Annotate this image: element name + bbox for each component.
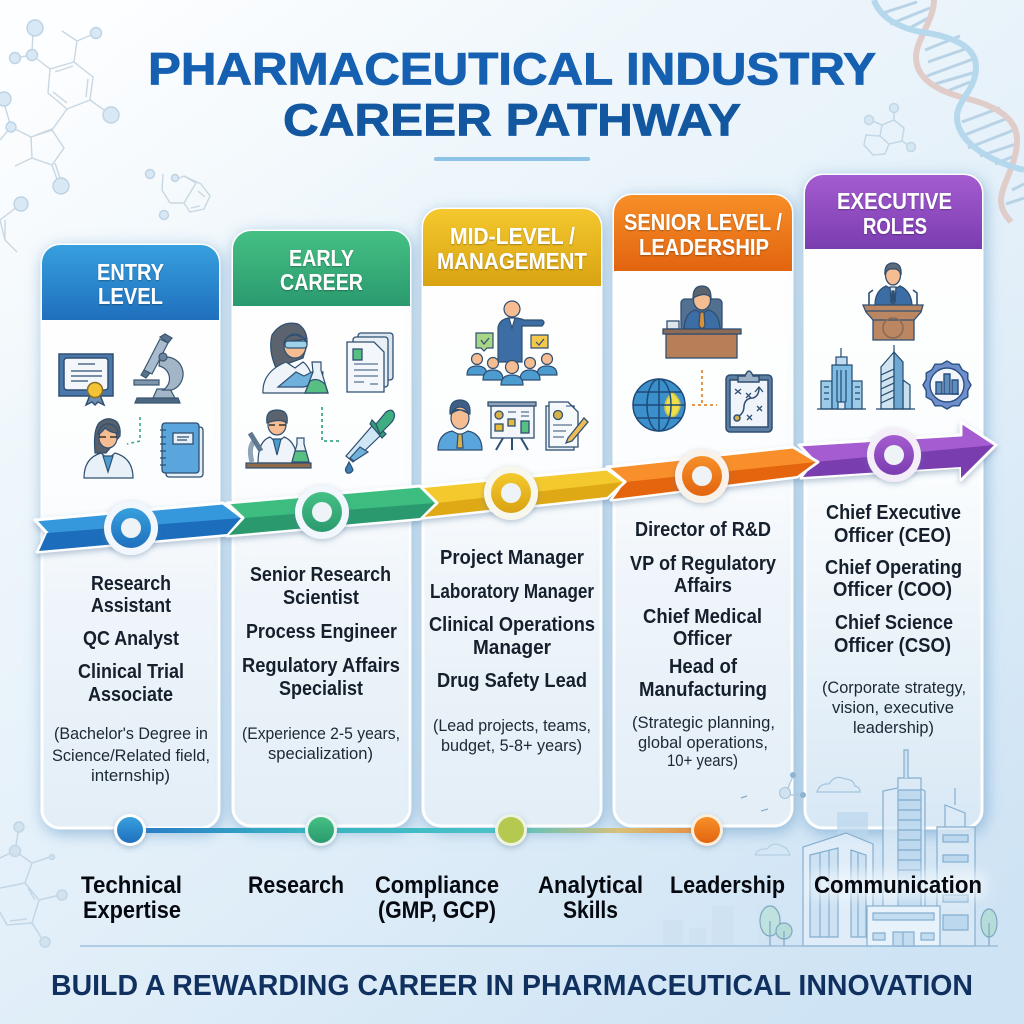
text: mid-level requirements: (Lead projects, teams, <box>433 717 591 735</box>
text: executive roles <box>825 502 962 657</box>
text: executive focus: leadership) <box>853 719 934 737</box>
title: PHARMACEUTICAL INDUSTRY <box>148 44 876 94</box>
decoration: molecule bottom left <box>0 822 67 947</box>
text: entry level requirements: Science/Related field, <box>52 747 210 765</box>
title <box>148 44 876 146</box>
text: executive focus: (Corporate strategy, <box>822 679 966 697</box>
heading: senior level leadership: SENIOR LEVEL / <box>624 209 783 235</box>
text: senior level requirements: (Strategic planning, <box>632 714 775 732</box>
skill labels: Skills <box>563 897 618 924</box>
icon: executive at desk <box>663 286 741 358</box>
panel: early career <box>233 231 410 826</box>
skill node: technical <box>114 814 146 846</box>
text: executive focus: vision, executive <box>832 699 954 717</box>
node: early career <box>295 485 349 539</box>
text: early career requirements: (Experience 2-5 years, <box>242 725 400 743</box>
illustration: city skyline <box>80 750 998 946</box>
ribbon segment: orange <box>607 447 818 500</box>
skill labels: Technical <box>81 872 182 899</box>
ribbon segment: purple arrow <box>799 422 996 480</box>
icon: dropper <box>346 410 394 473</box>
icon: notebook <box>160 423 203 477</box>
text: mid-level roles: Project Manager <box>440 547 584 569</box>
decoration: molecule top left <box>0 20 210 252</box>
text: early career roles: Process Engineer <box>246 621 397 643</box>
arrow: dotted <box>692 370 717 405</box>
icon: gear badge <box>923 361 971 409</box>
text: executive focus <box>822 679 966 737</box>
text: entry level roles: QC Analyst <box>83 628 179 650</box>
icon: document with pencil <box>546 402 588 450</box>
text: early career roles: Scientist <box>283 587 359 609</box>
heading: early career: EARLY <box>289 245 354 271</box>
panel: senior level leadership <box>614 195 792 826</box>
text: early career roles <box>242 564 400 700</box>
text: senior level roles: Chief Medical <box>643 606 762 628</box>
text: early career requirements: specialization) <box>268 745 373 763</box>
text: mid-level roles: Manager <box>473 637 551 659</box>
panel: mid-level management <box>423 209 601 826</box>
ribbon segment: green <box>227 486 437 536</box>
text: senior level roles: Affairs <box>674 575 732 597</box>
footer tagline: BUILD A REWARDING CAREER IN PHARMACEUTICAL INNOVATION <box>51 970 973 1002</box>
text: senior level roles: Director of R&D <box>635 519 771 541</box>
text: entry level roles: Associate <box>88 684 173 706</box>
text: mid-level roles: Clinical Operations <box>429 614 595 636</box>
node: mid-level <box>484 466 538 520</box>
text: senior level roles: Manufacturing <box>639 679 767 701</box>
text: senior level roles: Officer <box>673 628 732 650</box>
heading: early career <box>233 231 410 306</box>
icon: speaker at podium <box>863 263 923 340</box>
text: senior level requirements: 10+ years) <box>667 752 738 770</box>
text: mid-level requirements <box>433 717 591 755</box>
text: executive roles: Chief Executive <box>826 502 961 524</box>
decoration: small molecule top right <box>864 104 916 155</box>
text: early career requirements <box>242 725 400 763</box>
skill labels: (GMP, GCP) <box>378 897 496 924</box>
text: entry level requirements: (Bachelor's Degree in <box>54 725 208 743</box>
icon: documents <box>347 333 393 392</box>
heading: executive roles <box>805 175 982 249</box>
skill labels <box>81 872 982 924</box>
text: executive roles: Officer (COO) <box>833 579 952 601</box>
icon: presentation board <box>488 402 536 450</box>
icon: presenter with team <box>467 301 557 385</box>
skill node: research <box>305 814 337 846</box>
text: entry level requirements <box>52 725 210 785</box>
text: mid-level roles: Laboratory Manager <box>430 581 594 603</box>
heading: mid-level management: MANAGEMENT <box>437 248 587 274</box>
skill labels: Compliance <box>375 872 499 899</box>
panel: entry level <box>42 245 219 828</box>
text: entry level roles: Assistant <box>91 595 171 617</box>
text: senior level requirements: global operations, <box>638 734 768 752</box>
text: senior level roles: Head of <box>669 656 737 678</box>
skill labels: Communication <box>814 872 982 899</box>
heading: entry level <box>42 245 219 320</box>
text: executive roles: Officer (CEO) <box>834 525 951 547</box>
skill labels: Leadership <box>670 872 785 899</box>
heading: entry level: LEVEL <box>98 283 163 309</box>
text: entry level roles: Research <box>91 573 171 595</box>
text: senior level roles <box>630 519 777 701</box>
text: entry level requirements: internship) <box>91 767 170 785</box>
icon: strategy clipboard <box>726 371 772 432</box>
heading: senior level leadership <box>614 195 792 271</box>
heading: mid-level management: MID-LEVEL / <box>450 223 576 249</box>
node: entry level <box>104 501 158 555</box>
heading: senior level leadership: LEADERSHIP <box>639 234 769 260</box>
heading: executive roles: EXECUTIVE <box>837 188 952 214</box>
text: executive roles: Chief Operating <box>825 557 962 579</box>
skill node: compliance <box>495 814 527 846</box>
icon: female scientist <box>263 323 328 393</box>
node: senior level <box>675 449 729 503</box>
arrow: dotted <box>127 417 140 444</box>
icon: certificate <box>59 354 113 405</box>
node: executive <box>867 428 921 482</box>
text: mid-level roles: Drug Safety Lead <box>437 670 587 692</box>
text: entry level roles: Clinical Trial <box>78 661 184 683</box>
text: mid-level requirements: budget, 5-8+ years) <box>441 737 582 755</box>
ribbon segment: blue <box>35 503 243 552</box>
skill node: leadership <box>691 814 723 846</box>
icon: glass skyscraper <box>876 345 915 409</box>
text: early career roles: Regulatory Affairs <box>242 655 400 677</box>
skill labels: Research <box>248 872 344 899</box>
heading: entry level: ENTRY <box>97 259 164 285</box>
text: executive roles: Officer (CSO) <box>834 635 951 657</box>
text: senior level requirements <box>632 714 775 770</box>
text: early career roles: Senior Research <box>250 564 391 586</box>
heading: mid-level management <box>423 209 601 286</box>
text: early career roles: Specialist <box>279 678 363 700</box>
icon: male scientist with microscope <box>246 410 311 468</box>
text: mid-level roles <box>429 547 595 692</box>
text: executive roles: Chief Science <box>835 612 953 634</box>
decoration: DNA helix <box>874 0 1024 222</box>
icon: researcher <box>84 419 133 478</box>
heading: executive roles: ROLES <box>863 213 927 239</box>
icon: globe <box>633 379 685 431</box>
icon: microscope <box>134 334 183 403</box>
heading: early career: CAREER <box>280 269 363 295</box>
skill labels: Expertise <box>83 897 181 924</box>
title divider bar <box>434 157 590 161</box>
arrow: dotted <box>322 407 340 441</box>
title: CAREER PATHWAY <box>283 94 741 146</box>
career pathway ribbon <box>35 422 996 552</box>
text: entry level roles <box>78 573 184 706</box>
ribbon segment: yellow <box>418 469 625 518</box>
icon: corporate tower <box>817 348 866 409</box>
text: senior level roles: VP of Regulatory <box>630 553 777 575</box>
panel: executive roles <box>805 175 982 828</box>
icon: manager bust <box>438 400 482 450</box>
skill labels: Analytical <box>538 872 643 899</box>
skills progress track <box>114 814 723 846</box>
